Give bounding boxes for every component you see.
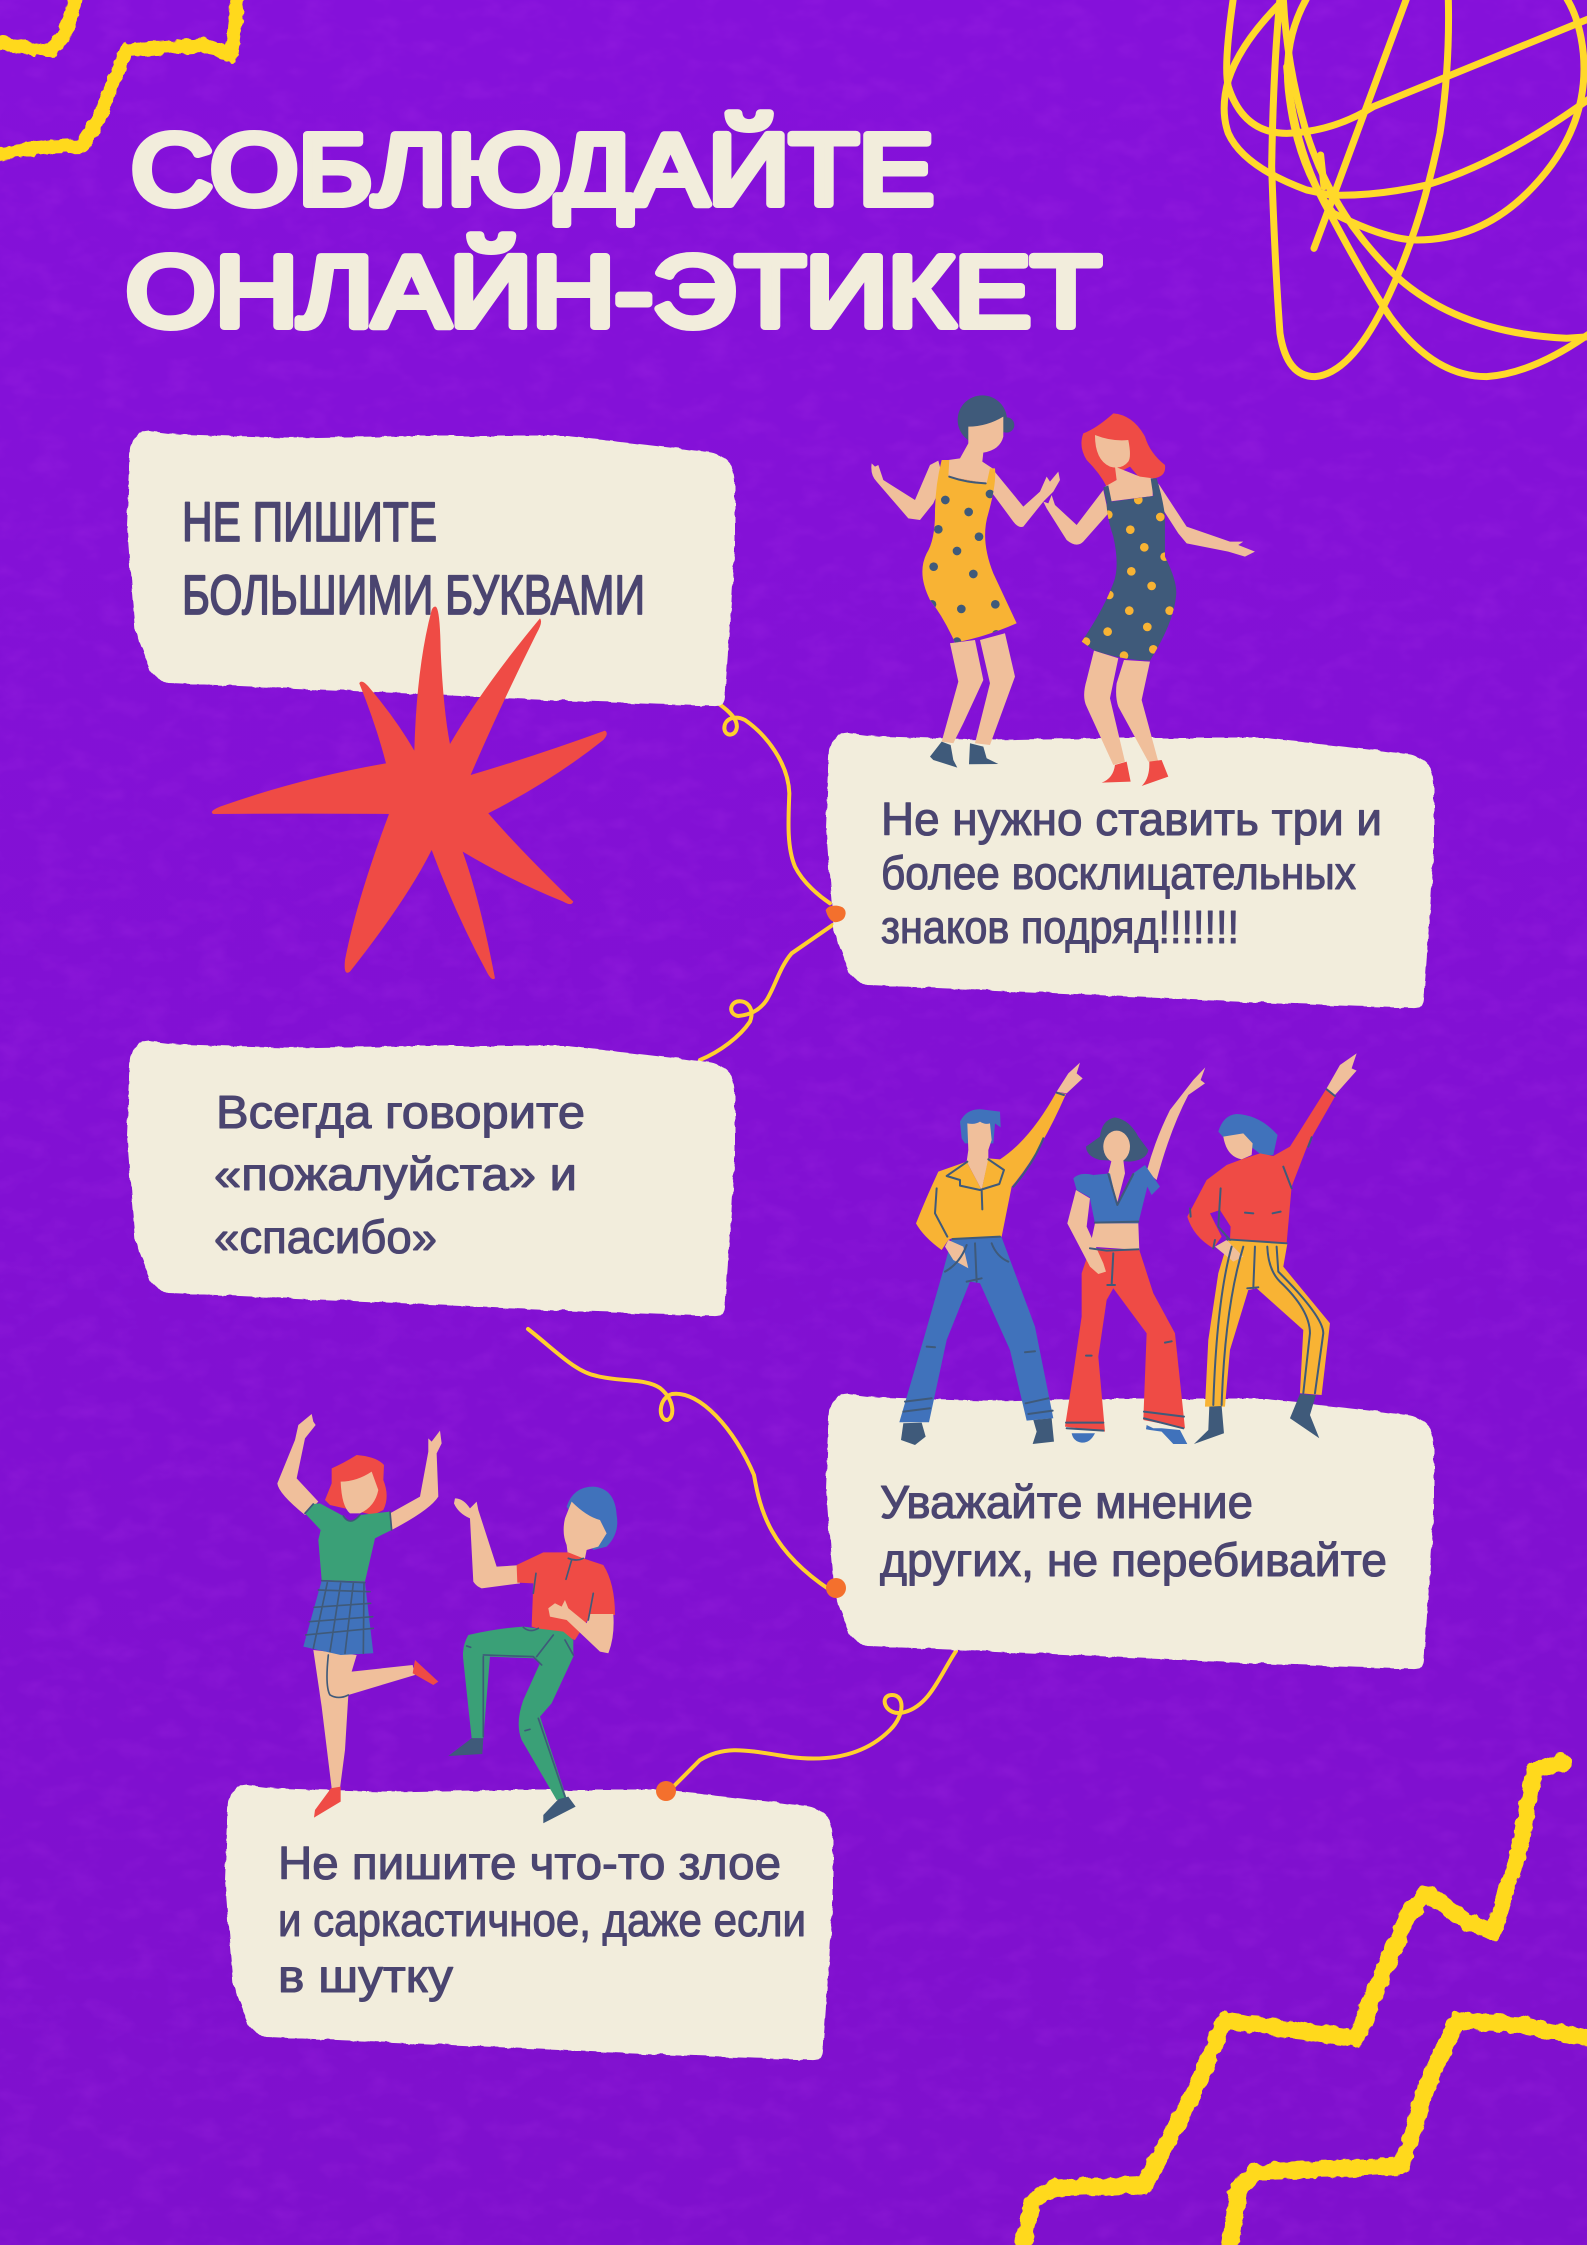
card 2 text bbox=[881, 793, 1382, 953]
connector dot 3 bbox=[656, 1781, 676, 1801]
title bbox=[126, 113, 1101, 348]
card 3 text: Всегда говорите bbox=[216, 1086, 585, 1138]
connector: card 1 to card 2 bbox=[718, 703, 830, 903]
card 3 text: «пожалуйста» и bbox=[214, 1148, 577, 1200]
title: СОБЛЮДАЙТЕ bbox=[131, 113, 934, 226]
connector dot 2 bbox=[826, 1578, 846, 1598]
card 1 text bbox=[182, 490, 645, 626]
card 2 bbox=[826, 733, 1434, 1008]
card 5 text: и саркастичное, даже если bbox=[278, 1894, 806, 1946]
card 4 text bbox=[880, 1476, 1387, 1586]
connector: card 4 to card 5 bbox=[670, 1651, 956, 1790]
title: ОНЛАЙН-ЭТИКЕТ bbox=[126, 235, 1101, 348]
card 4 text: других, не перебивайте bbox=[880, 1534, 1387, 1586]
card 3 text bbox=[214, 1086, 585, 1263]
illustration: dancing couple bbox=[277, 1414, 617, 1823]
card 3 bbox=[127, 1041, 735, 1316]
woman in red sweater bbox=[1187, 1053, 1357, 1444]
illustration: three dancers bbox=[899, 1053, 1357, 1445]
card 1 bbox=[127, 431, 735, 706]
card 2 text: знаков подряд!!!!!!! bbox=[881, 901, 1239, 953]
card 5 bbox=[225, 1785, 833, 2060]
card 2 text: более восклицательных bbox=[881, 847, 1356, 899]
card 4 text: Уважайте мнение bbox=[880, 1476, 1253, 1528]
connector: card 2 to card 3 bbox=[700, 925, 833, 1060]
man in red t-shirt bbox=[448, 1487, 617, 1823]
card 4 bbox=[826, 1394, 1434, 1669]
zigzags: bottom right bbox=[1022, 1762, 1587, 2245]
card 1 text: БОЛЬШИМИ БУКВАМИ bbox=[182, 563, 645, 626]
card 5 text: Не пишите что-то злое bbox=[278, 1837, 781, 1889]
woman in yellow dress bbox=[871, 395, 1060, 768]
connector dot 1 bbox=[826, 906, 846, 922]
woman in red trousers bbox=[1065, 1067, 1205, 1444]
card 2 text: Не нужно ставить три и bbox=[881, 793, 1382, 845]
red star bbox=[212, 607, 607, 979]
card 3 text: «спасибо» bbox=[214, 1211, 437, 1263]
card 5 text: в шутку bbox=[278, 1950, 453, 2002]
card 5 text bbox=[278, 1837, 806, 2002]
woman in navy dress bbox=[1043, 413, 1255, 786]
illustration: two women in polka dot dresses bbox=[871, 395, 1255, 786]
woman in green t-shirt bbox=[277, 1414, 442, 1818]
man in yellow shirt bbox=[899, 1063, 1083, 1445]
card 1 text: НЕ ПИШИТЕ bbox=[182, 490, 437, 553]
connector: card 3 to card 4 bbox=[528, 1329, 830, 1590]
scribble: top right bbox=[1224, 0, 1587, 377]
zigzag: top left bbox=[0, 0, 238, 154]
